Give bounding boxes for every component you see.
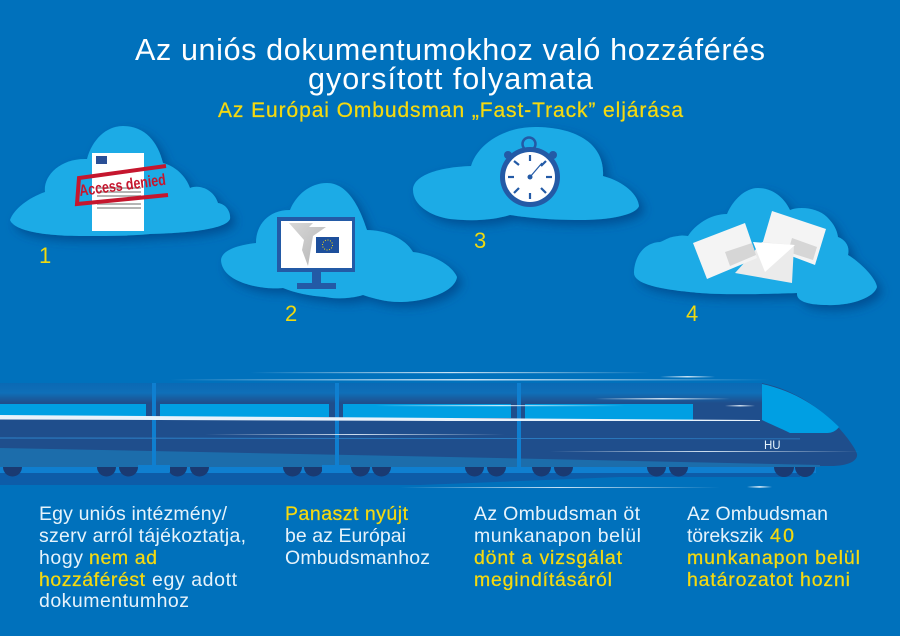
step 2 cloud with monitor: [221, 183, 457, 302]
subtitle: Az Európai Ombudsman „Fast-Track” eljárása: [218, 99, 683, 122]
carriage joints: [138, 383, 521, 472]
roof band: [0, 383, 762, 403]
text: step 3: [474, 503, 641, 591]
text: step 3: dönt a vizsgálat: [474, 547, 623, 569]
step 2 number: 2: [285, 301, 297, 326]
cloud 4: [634, 188, 877, 305]
text: step 1: [39, 503, 246, 612]
text: step 4: [687, 503, 860, 591]
undercarriage shadow: [0, 470, 800, 485]
text: step 3: munkanapon belül: [474, 525, 641, 547]
text: step 1: hogy: [39, 547, 83, 569]
text: step 1: dokumentumhoz: [39, 590, 189, 612]
step 4 number: 4: [686, 301, 698, 326]
text: step 2: Ombudsmanhoz: [285, 547, 430, 569]
text: step 1: nem ad: [89, 547, 157, 569]
white window stripe: [0, 415, 760, 421]
icon: document: [92, 153, 144, 231]
title: [135, 33, 765, 96]
step 1 cloud with document: [10, 126, 230, 236]
text: step 4: Az Ombudsman: [687, 503, 828, 525]
icon: stopwatch: [500, 138, 560, 207]
icon: access denied stamp: [77, 166, 168, 204]
lower body band: [0, 448, 820, 467]
text: step 4: 40: [770, 525, 794, 547]
text: step 1: szerv arról tájékoztatja,: [39, 525, 246, 547]
icon: access denied stamp: Access denied: [78, 172, 167, 200]
text: step 4: határozatot hozni: [687, 569, 850, 591]
text: step 1: Egy uniós intézmény/: [39, 503, 228, 525]
text: step 4: munkanapon belül: [687, 547, 860, 569]
train body: [0, 383, 857, 466]
text: step 2: Panaszt nyújt: [285, 503, 409, 525]
body line: [0, 438, 800, 439]
text: step 4: törekszik: [687, 525, 763, 547]
speed lines: [170, 372, 860, 488]
text: step 2: be az Európai: [285, 525, 406, 547]
cloud 2: [221, 183, 457, 302]
text: step 1: egy adott: [152, 569, 238, 591]
step 3 cloud with stopwatch: [413, 127, 639, 220]
icon: monitor: [277, 217, 355, 289]
text: step 2: [285, 503, 430, 569]
step 4 cloud with envelopes: [634, 188, 877, 305]
text: step 3: Az Ombudsman öt: [474, 503, 641, 525]
carriage windows: [0, 404, 693, 420]
step 3 number: 3: [474, 228, 486, 253]
text: step 3: megindításáról: [474, 569, 612, 591]
icon: envelopes: [693, 211, 826, 283]
title: gyorsított folyamata: [308, 62, 593, 96]
cab windscreen: [762, 384, 839, 433]
bottom strip: [0, 467, 816, 473]
wheels: [3, 467, 815, 477]
title: Az uniós dokumentumokhoz való hozzáférés: [135, 33, 765, 67]
text: step 1: hozzáférést: [39, 569, 146, 591]
train: [0, 372, 860, 488]
cloud 3: [413, 127, 639, 220]
cloud 1: [10, 126, 230, 236]
country code: HU: [764, 440, 781, 452]
step 1 number: 1: [39, 243, 51, 268]
